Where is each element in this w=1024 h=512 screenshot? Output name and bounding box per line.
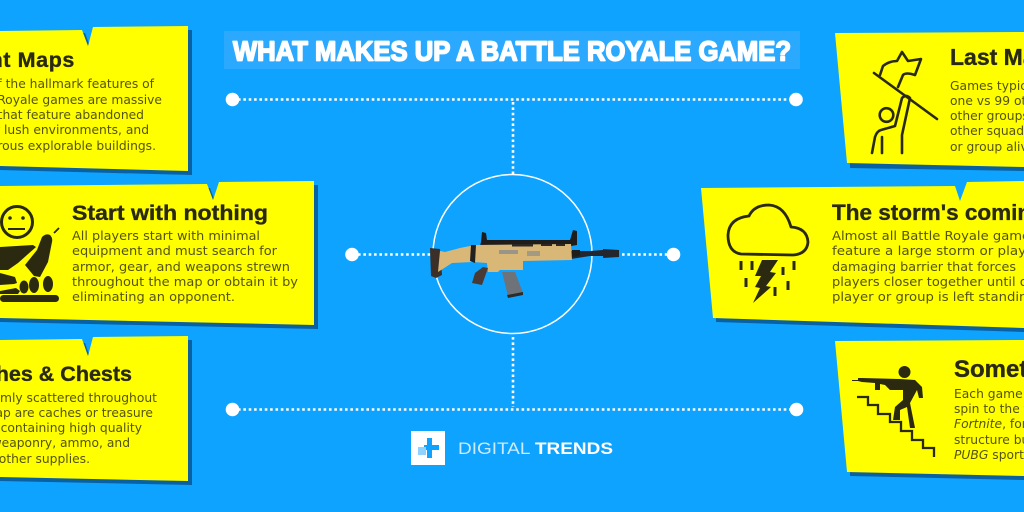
- panel: start with nothing: equipment and must search for: [72, 244, 278, 258]
- panel: the storm's coming: Almost all Battle Royale games: [832, 229, 1024, 243]
- panel: caches and chests: other supplies.: [0, 452, 90, 466]
- panel: last man standing: [835, 32, 1024, 171]
- title: WHAT MAKES UP A BATTLE ROYALE GAME?: [233, 36, 791, 66]
- panel: start with nothing: armor, gear, and weapons strewn: [72, 260, 290, 274]
- icon: soldier on stairs with rifle: [852, 366, 934, 457]
- connector lines: [226, 93, 803, 416]
- icon: seated player with grenades: [0, 206, 59, 302]
- panel: something new: [835, 340, 1024, 480]
- panel: giant maps: [0, 26, 192, 175]
- panel: the storm's coming: player or group is left standing.: [832, 290, 1024, 304]
- panel: the storm's coming: [701, 181, 1024, 332]
- panel: the storm's coming: damaging barrier that forces: [832, 260, 1016, 274]
- icon: figure raising flag: [872, 52, 937, 153]
- icon: assault rifle: [430, 230, 619, 298]
- logo: digital trends: [411, 431, 613, 465]
- panel: start with nothing: Start with nothing: [72, 201, 268, 225]
- logo: digital trends: DIGITAL TRENDS: [458, 439, 613, 458]
- panel: the storm's coming: feature a large storm or player-: [832, 244, 1024, 258]
- ring around rifle: [433, 174, 592, 334]
- panel: start with nothing: All players start with minimal: [72, 229, 260, 243]
- panel: start with nothing: [0, 181, 318, 329]
- icon: storm cloud with lightning: [728, 205, 808, 303]
- panel: caches and chests: [0, 336, 192, 485]
- panel: start with nothing: throughout the map or obtain it by: [72, 275, 298, 289]
- panel: start with nothing: eliminating an opponent.: [72, 290, 235, 304]
